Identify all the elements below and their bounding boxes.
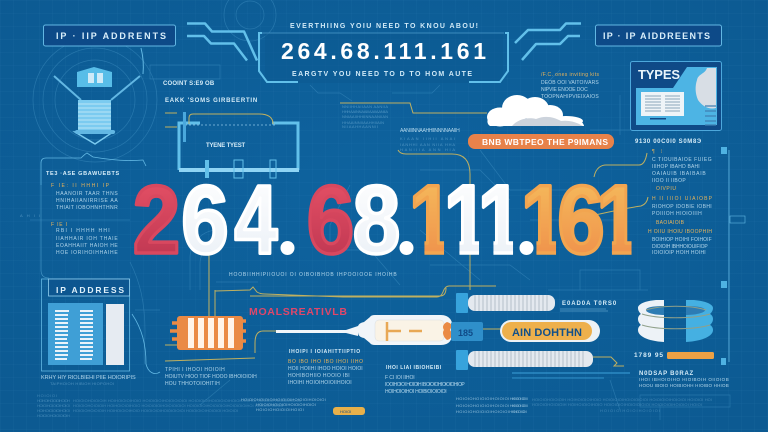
- text lines center upper: HHHAAINNAAIIIAAIIAANIIA: [342, 109, 388, 114]
- text: lower right notes: IHOI IBHOIOIHO HIOIBOIH OIIOIOB: [639, 377, 729, 382]
- box: value 185: 185: [458, 328, 473, 338]
- diagram frame: TYENE TYEST: [206, 143, 246, 149]
- title block: EARGTV YOU NEED TO D TO HOM AUTE: [292, 71, 472, 78]
- text: lower left notes: [165, 367, 257, 387]
- tag: small amber footer label: HOIOI: [340, 409, 351, 414]
- digit 6 red: 6: [307, 166, 354, 274]
- text: upper right notes: NIPVIE ENOOE DOC: [541, 87, 588, 93]
- pill: orange heading: [468, 134, 614, 149]
- panel: types: [630, 62, 722, 130]
- icon: server and antenna: [54, 48, 143, 144]
- dot 1: [280, 241, 294, 255]
- text lines center upper: HHAAINNIIAAHHIIAIN: [342, 120, 384, 125]
- text: center right notes: [385, 365, 465, 395]
- diagram frame: [165, 112, 299, 178]
- text: bars caption: E0AD0A T0RS0: [562, 301, 617, 307]
- pill: AIN DOHTHN: [500, 320, 600, 342]
- label: top left IP address: IP · IIP ADDRENTS: [56, 31, 166, 41]
- text: footer lines: HOIOIOHOIOIOIH HOIHOIOIOIHOIO HOIOIOIOIHOIOIOIOIOI HOIOIOIOIHOIOIOIOIHOIOIOIOIHOI HOIOIOI HOIOIOHOIOI: [73, 398, 301, 403]
- text: center left notes: IHOIPI I IOIAHITTIIPTIO: [289, 349, 361, 355]
- text: left column notes: RBI I HHHH HHI: [56, 228, 110, 234]
- text: lower right notes: N0DSAP B0RAZ: [639, 371, 694, 377]
- text lines center upper: NNIIHHAIIAAN AANIIA: [342, 104, 388, 109]
- text: footer lines: HOIOIOI: [37, 393, 57, 398]
- text: right column notes: OAIAUIB IBAIBAIB: [652, 171, 706, 177]
- text: left column notes: F IE I: [51, 222, 67, 228]
- digit 8: 8: [353, 166, 400, 274]
- panel: types: TYPES: [638, 67, 680, 82]
- text: upper right notes: TOOPNAHIPVIEIXAIOS: [541, 94, 599, 100]
- tag: small amber footer label: [333, 407, 365, 415]
- text: left column notes: F IE: II HHHI IP: [51, 183, 110, 189]
- text: left column notes: TE3 ·ASE GBAWUEBTS: [46, 171, 120, 177]
- label: top left IP address: [44, 25, 176, 46]
- text: footer lines: [37, 393, 712, 418]
- chevron lines right: [515, 24, 581, 60]
- text: lower right notes: HOOU IBOIO HOIBIOHH HIOIBO HHIOB: [639, 383, 729, 388]
- pill: orange heading: BNB WBTPEO THE P9IMANS: [482, 137, 608, 147]
- bar: top striped: [456, 293, 555, 313]
- text: center right notes: HOIHOIOIHOI HOIBIOIOIOIOI: [385, 389, 447, 395]
- text: right column notes: OIVPIU: [656, 186, 676, 192]
- big IP address numerals: [134, 184, 632, 256]
- digit 6 orange: 6: [557, 166, 605, 274]
- text: upper right notes: /F.C. ones inviting kits: [541, 72, 600, 78]
- text: upper right notes: [541, 72, 600, 100]
- connector lines center: [165, 103, 648, 366]
- text: footer lines: HOIOI: [512, 409, 527, 414]
- text lines center upper: [342, 104, 460, 152]
- heading: red label: MOALSREATIVLB: [249, 306, 347, 318]
- text: right column notes: BAOIAIOIB: [656, 220, 685, 226]
- text line under numerals: HOOBIIHHIPIIOUOI OI OIBOIBHOB IHPOOIOOE IHOIHB: [229, 272, 397, 278]
- text: right column notes: IIOO II IIBOP: [652, 178, 686, 184]
- digit 1 orange second: 1: [521, 166, 565, 274]
- text lines center upper: NIIAAHHAANNII: [342, 124, 378, 129]
- text: footer lines: HOIOIOHOIOIOIH HOIHOIOIOIHOIO HOIOIOIOIHOIOIOIOIOI HOIOIOIOIHOIOIOI HOIOI: [532, 402, 702, 407]
- title block: [259, 23, 508, 83]
- text: lower right notes: [512, 371, 729, 388]
- text: IP address caption: KRHY HIY RIOLBIEHI PIIE HOIORIPIS: [41, 375, 136, 381]
- text: upper right notes: DEOB OOI VAITOIVARS: [541, 80, 599, 86]
- label: top right IP address: IP · IP AIDDREENTS: [603, 31, 710, 41]
- text: left column notes: THIAIT IOBOHNHTHNR: [56, 205, 118, 211]
- text: right column notes: ¶ ⁞: [652, 149, 662, 155]
- title block: EVERTHIING YOIU NEED TO KNOU ABOU!: [290, 23, 478, 30]
- title block: 264.68.111.161: [281, 38, 486, 64]
- text lines center upper: HANIIIA ANN HIA: [400, 147, 455, 152]
- text: center left notes: BO IBO IHO IBO IHOI IIHO: [288, 359, 363, 365]
- text: right column notes: IIIHOP IBAHD BAHI: [652, 164, 700, 170]
- text: diagram captions: EAKK 'SOMS GIRBEERTIN: [165, 98, 258, 104]
- text lines center upper: IANHHI AAN NIIA HHA: [400, 142, 455, 147]
- text: lower left notes: HOU THHOTOIOHITIH: [165, 381, 220, 387]
- text: center left notes: HOHIBOHIIO HOOIO IBI: [288, 373, 350, 379]
- text: right column notes: DIOIOIH IBHHOIOUIFIOP: [652, 244, 708, 250]
- text: center right notes: F CI IOI IIHOI: [385, 375, 415, 381]
- digit 2: 2: [133, 166, 180, 274]
- text: center left notes: HOII HOIIHI IHOO HOIOI HOIOI: [288, 366, 363, 372]
- text: bars caption: [560, 301, 617, 311]
- digit 6: 6: [181, 166, 229, 274]
- label: top right IP address: [596, 25, 722, 46]
- bar: bottom striped: [456, 350, 593, 370]
- text: left column notes: HOE IORIHOIHHAIHE: [56, 250, 118, 256]
- text: footer lines: HOIOIOHOIOIOIHOIOIOIHOIOI: [256, 402, 316, 407]
- text: footer lines: HOIOIOHOIOIOIHOIOIOIHOIOIO: [456, 409, 526, 414]
- text: footer lines: HOIOIOHOIOIOIHOIOI: [256, 407, 304, 412]
- text: right column notes: IOIOIOIP HOIH HOIHI: [652, 250, 706, 256]
- text: footer lines: HOIOIOIHOIOIHOIOIOI: [600, 408, 660, 413]
- text: diagram captions: COOINT S:E9 OB: [163, 81, 215, 87]
- pill: AIN DOHTHN: AIN DOHTHN: [512, 327, 582, 339]
- text: footer lines: HOIOI: [512, 403, 527, 408]
- text: types caption: 9130 00C0I0 S0M8Э: [635, 139, 702, 145]
- text: IP address caption: [41, 375, 136, 386]
- text: footer lines: HOIOIOHOIOIOIH HOIHOIOIOIHOIO HOIOIOIOIHOIOIOIOIOI HOIOIOIOIHOIOIOIOIHOIOIOIOIHOI HOIOIOI HOIOI: [73, 403, 283, 408]
- text: footer lines: HOIHOIOIOIOIHOIOI: [37, 408, 70, 413]
- text lines center upper: AANIIINNAAHHIINNNNAAIIH: [400, 128, 460, 134]
- digit 1 white: 1: [444, 166, 488, 274]
- text: lower left notes: TPIHI I IHOOI HOIOIH: [165, 367, 225, 373]
- text: diagram captions: [163, 81, 258, 104]
- text: left column notes: HNIHAIIANIRRISE AA: [56, 198, 118, 204]
- text: center left notes: [288, 349, 363, 386]
- text: right column notes: H OIIU IHOIU IBOOPHIH: [648, 229, 712, 235]
- text: left column notes: IIAHHAIR IOH THAIE: [56, 236, 118, 242]
- digit 1 orange: 1: [409, 166, 453, 274]
- label: value with orange tag: [634, 352, 714, 359]
- text: footer lines: HOIOIOHOIOIOIH HOIHOIOIOIHOIO HOIOIOIOIHOIOIOIOIOI HOIOIOIOIHOIOIOI HOIOIOI: [73, 408, 238, 413]
- cloud: [487, 95, 584, 126]
- text: footer lines: HOIOIOHOIOIOIH HOIHOIOIOIHOIO HOIOIOIOIHOIOIOIOIOI HOIOIOIOIHOIOIOI HOIOIOI HOI: [532, 397, 712, 402]
- text: right column notes: C TIOUIBAIOE FUIEG: [652, 157, 712, 163]
- text: IP address caption: TAIPHOIOH HIBIOH HIOPOHOI: [50, 381, 114, 386]
- label: value with orange tag: 1789 95: [634, 352, 663, 359]
- icon: syringe: [276, 315, 453, 345]
- digit 1 white second: 1: [478, 166, 522, 274]
- text: footer lines: HOIOIOHOIOIOIHOIOIOIHOIOIOI: [456, 403, 528, 408]
- chevron lines left: [187, 24, 257, 60]
- text: footer lines: HOIOIOHOIOIOIHOIOIOIHOIOIOIHOIOIOI: [241, 397, 326, 402]
- dot 3: [520, 241, 534, 255]
- text: right column notes: BOIHIOP HOIHI FOIHOIF: [652, 237, 712, 243]
- panel: IP address: [42, 279, 130, 371]
- text: right column notes: [648, 149, 713, 256]
- text: center left notes: IHOIHI HOIOIHOIOIIHOIOI: [288, 380, 352, 386]
- text: footer lines: HOIOIOHOIOIOIOIH: [37, 413, 70, 418]
- box: value 185: [451, 322, 500, 341]
- vertical dimension line right: [721, 147, 745, 365]
- digit 4: 4: [234, 165, 278, 274]
- icon: database rings: [638, 300, 713, 342]
- arrow curve from panel: [132, 314, 160, 374]
- text: center right notes: IHOI LIAI IBIOHEIBI: [386, 365, 442, 371]
- icon: chip: [170, 316, 246, 350]
- text: footer lines: HOIHOIHOIOIOIHOIOH: [37, 398, 70, 403]
- text: footer lines: HOIOIHOIOIOIHOIOI: [37, 403, 70, 408]
- text: lower left notes: HOIUTV HIOO TIOF HOOO IBHOIOIOIH: [165, 374, 257, 380]
- text: left column notes: AHII: [20, 213, 40, 218]
- text: right column notes: H II IIIOI UIAIOBP: [652, 196, 713, 202]
- text: footer lines: HOIOI: [512, 396, 527, 401]
- dot 2: [400, 241, 414, 255]
- text: footer lines: HOIOIOHOIOIOIHOIOIOIHOIOIOI: [456, 396, 528, 401]
- text: left column notes: [20, 153, 146, 278]
- text lines center upper: KIAAN IIHII ANAI: [400, 136, 455, 141]
- digit 1 orange third: 1: [596, 166, 641, 274]
- text: right column notes: POIIIOH HIOIOIIIH: [652, 211, 702, 217]
- panel: IP address: IP ADDRESS: [56, 285, 124, 295]
- text: center right notes: IOOIHOIOI HOIOIH IBOIOIOHIOIOIOHIOP: [385, 382, 465, 388]
- text: left column notes: EOAHHAIIT HAIOH HE: [56, 243, 118, 249]
- text: left column notes: HAANOIR TAAR THNS: [56, 191, 118, 197]
- text lines center upper: NNIAAIIHHIINNAANIIAN: [342, 114, 388, 119]
- text: right column notes: RIOHOP IDOBIE IOBHI: [652, 204, 712, 210]
